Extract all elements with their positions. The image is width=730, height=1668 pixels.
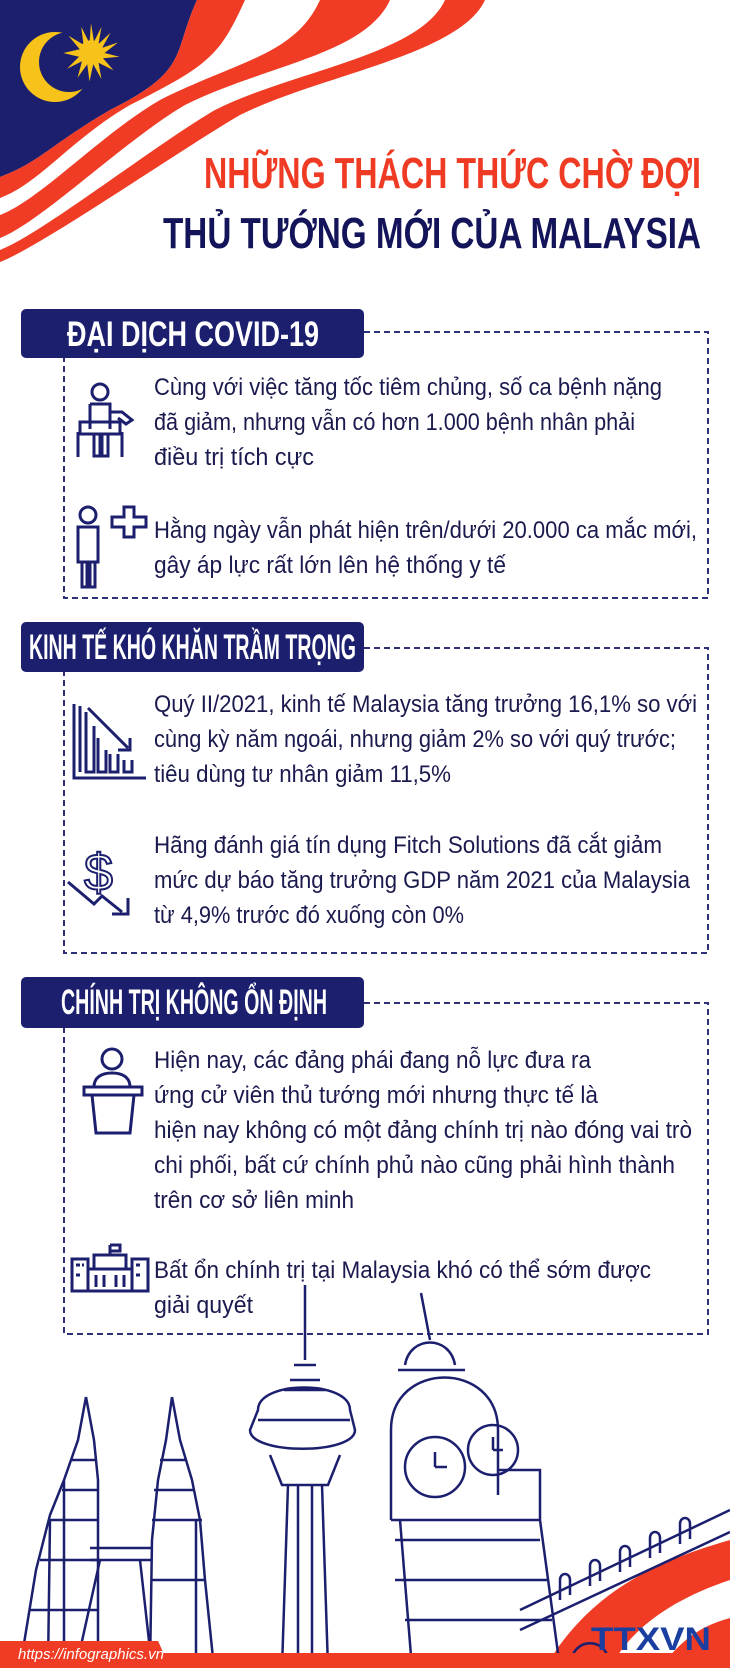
text: item 1: Cùng với việc tăng tốc tiêm chủng, số ca bệnh nặng xyxy=(154,374,662,401)
text: item 2 xyxy=(154,1257,651,1319)
text: item 1 xyxy=(154,374,662,471)
text: item 2 xyxy=(154,517,697,579)
icon: patient xyxy=(78,384,132,457)
skybridge xyxy=(80,1548,152,1650)
skyline illustration xyxy=(23,1285,730,1653)
text: item 1: hiện nay không có một đảng chính trị nào đóng vai trò xyxy=(154,1117,692,1144)
text: item 2: từ 4,9% trước đó xuống còn 0% xyxy=(154,902,464,929)
logo: TTXVN: TTXVN xyxy=(591,1621,711,1656)
footer url: https://infographics.vn xyxy=(18,1646,164,1663)
icon: dollar down xyxy=(68,844,128,914)
text: item 1: đã giảm, nhưng vẫn có hơn 1.000 bệnh nhân phải xyxy=(154,409,635,436)
icon: star xyxy=(63,23,120,82)
text: item 2: giải quyết xyxy=(154,1292,253,1319)
text: item 2: gây áp lực rất lớn lên hệ thống y tế xyxy=(154,552,507,579)
heading: covid: ĐẠI DỊCH COVID-19 xyxy=(67,315,319,354)
text: item 1: chi phối, bất cứ chính phủ nào cũng phải hình thành xyxy=(154,1152,675,1179)
text: item 2 xyxy=(154,832,691,929)
heading: politics: CHÍNH TRỊ KHÔNG ỔN ĐỊNH xyxy=(61,982,327,1022)
text: item 2: Hằng ngày vẫn phát hiện trên/dưới 20.000 ca mắc mới, xyxy=(154,517,697,544)
text: item 1: cùng kỳ năm ngoái, nhưng giảm 2% so với quý trước; xyxy=(154,726,676,753)
heading: economy: KINH TẾ KHÓ KHĂN TRẦM TRỌNG xyxy=(29,627,356,667)
panel: economy xyxy=(21,622,709,954)
panel: politics xyxy=(21,977,709,1335)
text: item 2: mức dự báo tăng trưởng GDP năm 2021 của Malaysia xyxy=(154,867,691,894)
heading: economy xyxy=(21,622,364,672)
KL tower xyxy=(250,1285,355,1668)
icon: podium speaker xyxy=(84,1049,142,1133)
heading: politics xyxy=(21,977,364,1028)
icon: government building xyxy=(72,1245,148,1291)
arcade xyxy=(520,1510,730,1668)
panel: covid xyxy=(21,309,709,599)
text: item 2: Bất ổn chính trị tại Malaysia khó có thể sớm được xyxy=(154,1257,651,1284)
text: item 1: ứng cử viên thủ tướng mới nhưng thực tế là xyxy=(154,1082,599,1109)
text: item 1: Quý II/2021, kinh tế Malaysia tăng trưởng 16,1% so với xyxy=(154,691,697,718)
title xyxy=(163,148,701,258)
text: item 2: Hãng đánh giá tín dụng Fitch Solutions đã cắt giảm xyxy=(154,832,662,859)
icon: falling chart xyxy=(74,704,146,778)
icon: crescent xyxy=(20,32,99,102)
text: item 1: Hiện nay, các đảng phái đang nỗ lực đưa ra xyxy=(154,1047,592,1074)
clock tower xyxy=(391,1293,560,1668)
petronas 2 xyxy=(150,1397,214,1668)
text: item 1: trên cơ sở liên minh xyxy=(154,1187,354,1214)
text: item 1 xyxy=(154,691,697,788)
text: item 1: điều trị tích cực xyxy=(154,444,314,471)
footer bar xyxy=(0,1653,730,1668)
text: item 1: tiêu dùng tư nhân giảm 11,5% xyxy=(154,761,451,788)
footer url xyxy=(0,1641,164,1662)
heading: covid xyxy=(21,309,364,358)
flag banner xyxy=(0,0,485,262)
petronas 1 xyxy=(20,1397,98,1668)
icon: dollar down: $ xyxy=(84,844,113,902)
icon: person with cross xyxy=(78,507,146,587)
text: item 1 xyxy=(154,1047,692,1214)
